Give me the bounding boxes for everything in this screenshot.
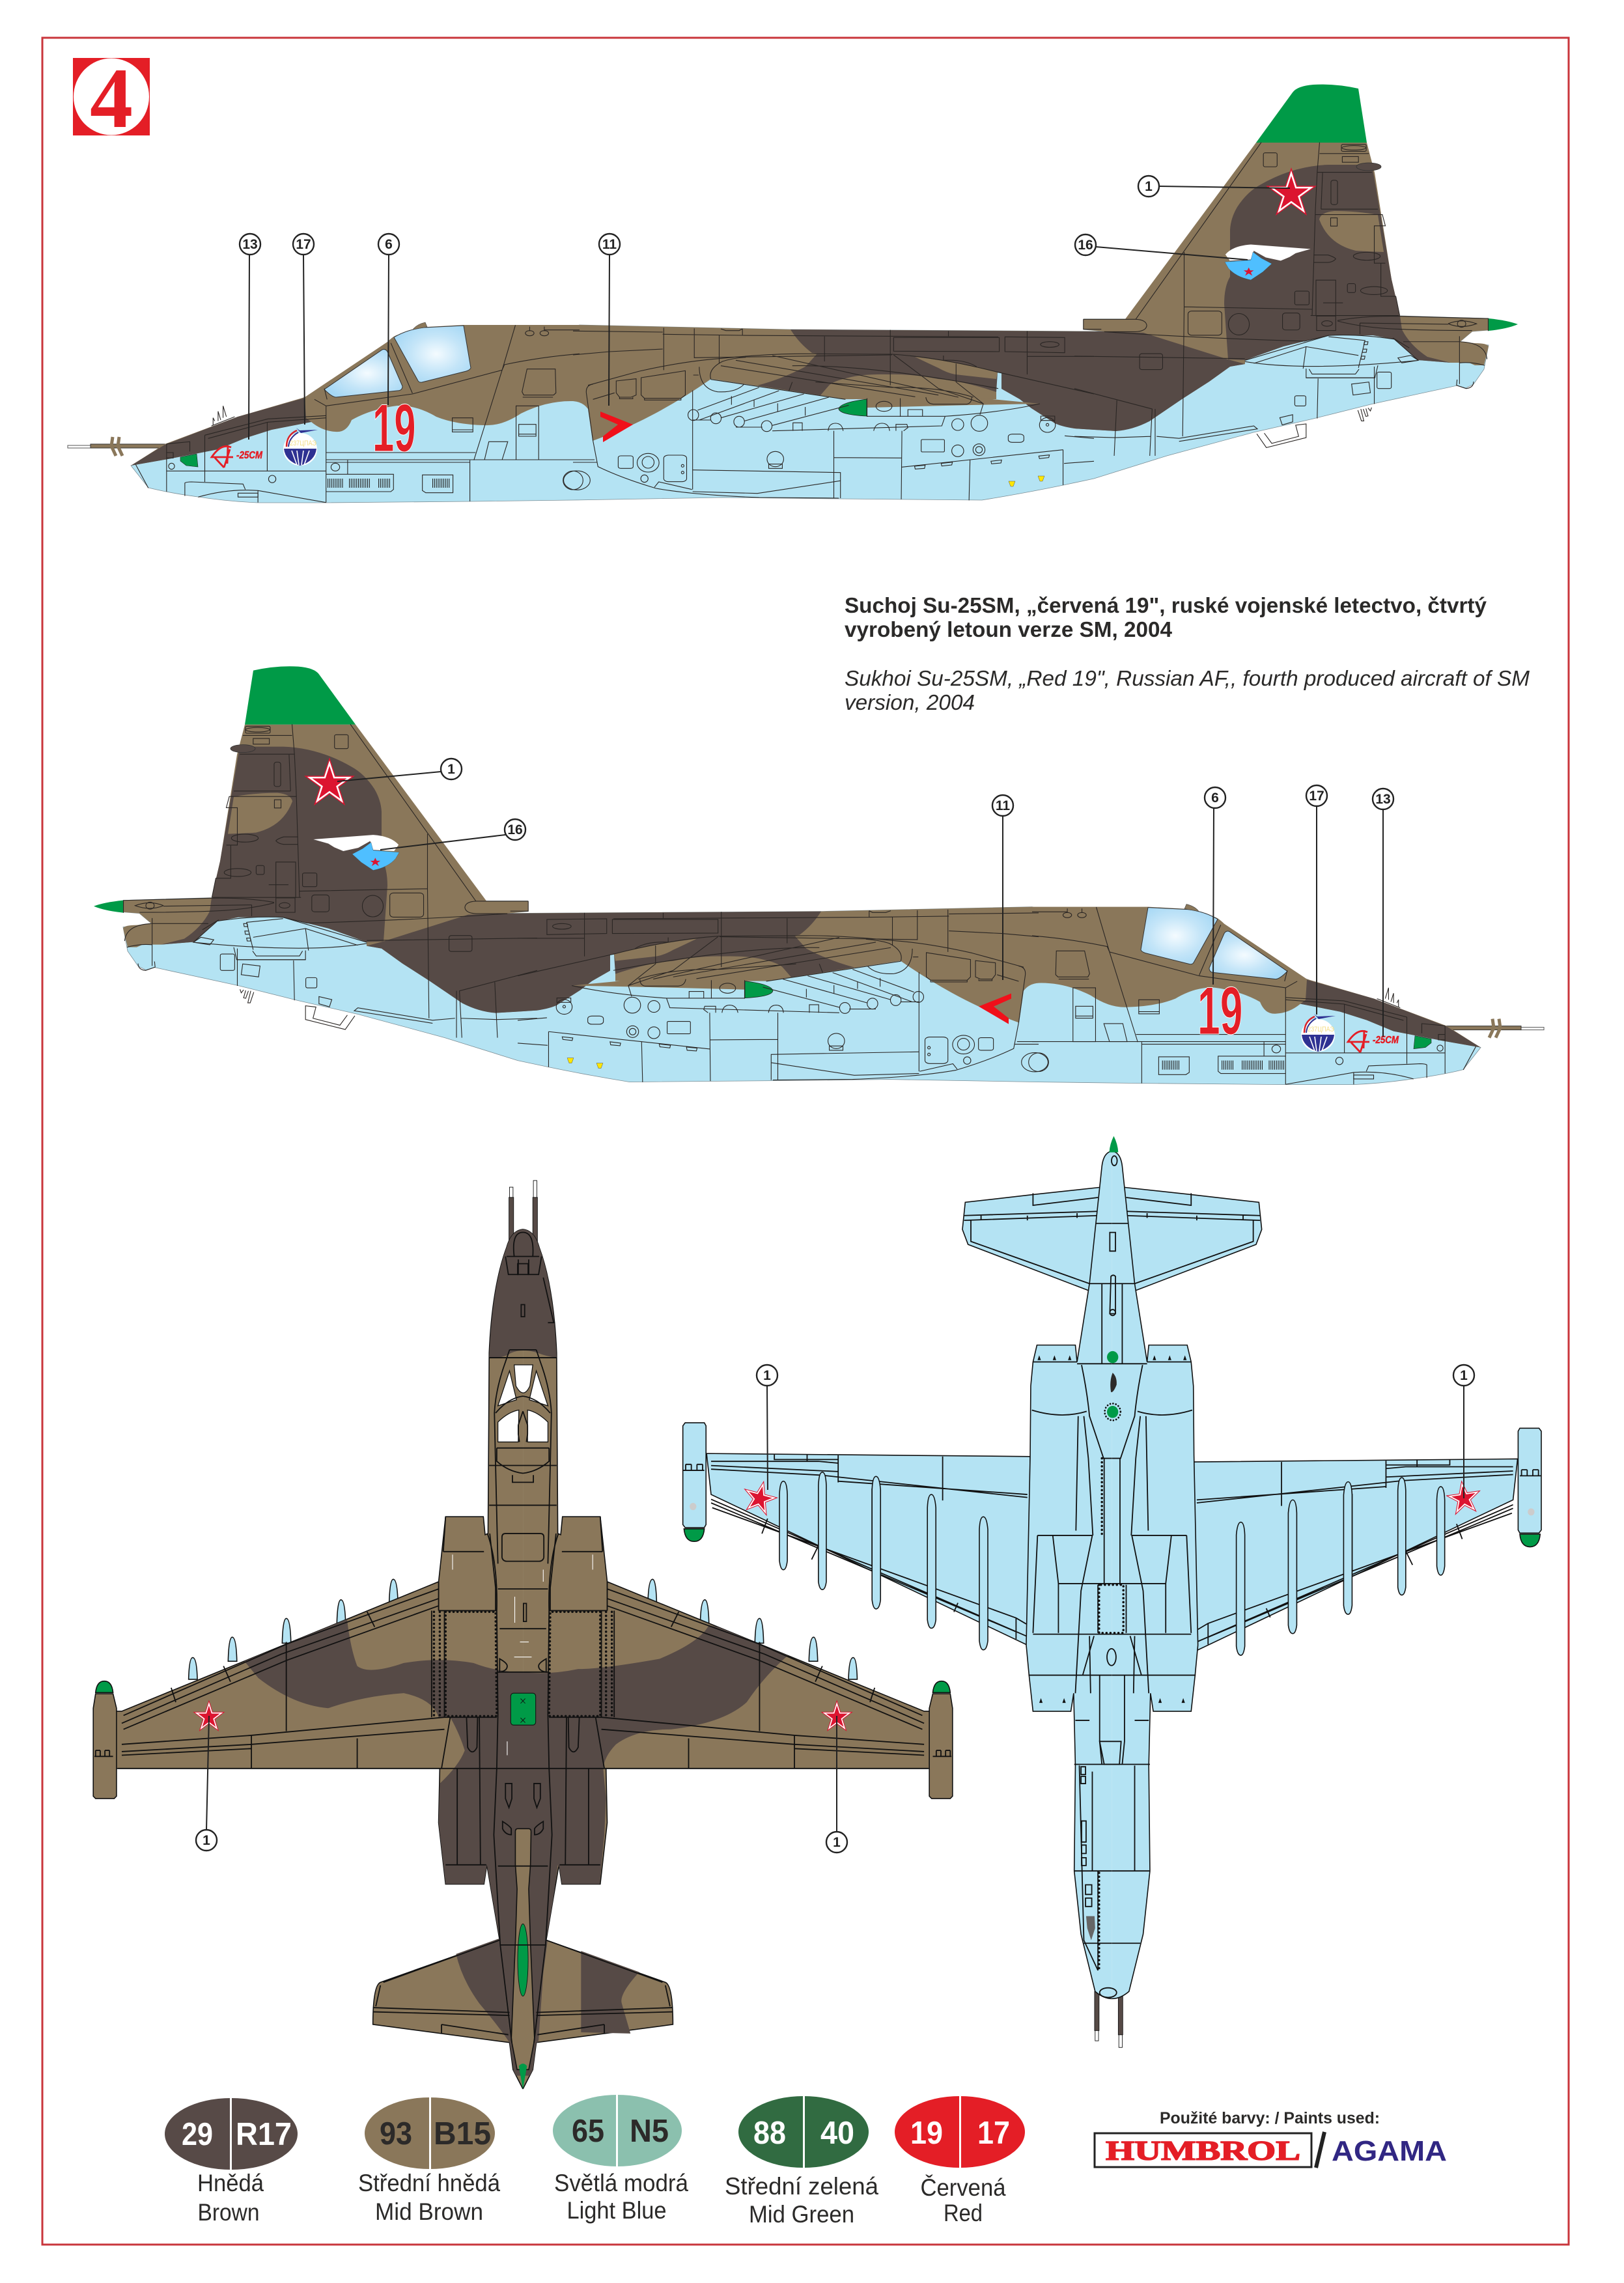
camouflage wing and body dark band	[241, 1617, 793, 2076]
camouflage right tailplane	[581, 1951, 639, 2034]
aircraft: right side profile	[94, 666, 1544, 1085]
callouts: lower profile: 6	[1211, 791, 1219, 805]
right wing star top	[821, 1700, 853, 1731]
callouts: upper profile: 11	[602, 237, 617, 252]
badge: profile number 4: 4	[90, 50, 133, 146]
callouts: upper profile	[240, 176, 1290, 440]
callouts: upper profile: 13	[242, 237, 258, 252]
wing half	[683, 1423, 1030, 1650]
green tail tip	[519, 2064, 527, 2089]
gun barrel	[68, 437, 167, 456]
nose side panels left only	[1080, 1765, 1135, 1970]
camouflage nose dark	[489, 1229, 557, 1358]
camouflage left tailplane	[456, 1939, 510, 2043]
paint swatch: brown: R17	[236, 2117, 292, 2152]
paint swatch: red: Red	[944, 2200, 983, 2226]
dark vent	[1110, 1373, 1117, 1392]
number 19 lower: 19	[1197, 973, 1242, 1049]
green access panel	[511, 1693, 536, 1725]
callouts: plan views: 1	[763, 1368, 771, 1383]
fuselage fill	[1026, 1151, 1112, 1998]
antenna behind canopy	[413, 322, 427, 329]
half airframe fill	[116, 1229, 523, 2089]
paint swatch: mid green: 88	[753, 2116, 786, 2151]
tailplane	[962, 1187, 1100, 1291]
dotted rows	[1099, 1459, 1123, 1970]
green fin tip	[1256, 85, 1367, 143]
wing pylons	[779, 1472, 988, 1650]
paint swatch: red: Červená	[921, 2174, 1006, 2201]
paint swatch: mid brown: 93	[380, 2116, 412, 2151]
callouts: plan views: 1	[833, 1835, 841, 1850]
camouflage: dark brown nose	[131, 398, 311, 466]
callouts: lower profile: 1	[447, 762, 455, 777]
paint swatch: red: 17	[977, 2116, 1010, 2151]
squadron logo on upper profile	[212, 445, 263, 468]
guns	[509, 1181, 537, 1257]
logo slash	[1316, 2132, 1324, 2168]
front canopy glass	[324, 349, 402, 397]
green fitting with ring	[1105, 1403, 1121, 1420]
paint swatch: light blue: 65	[572, 2114, 604, 2149]
camouflage: brown patch on fin	[1319, 211, 1384, 252]
callouts: plan views: 1	[203, 1833, 210, 1848]
wing roundels top	[193, 1700, 225, 1731]
paint swatch: mid green: Mid Green	[749, 2201, 854, 2228]
mirrored line work	[489, 1350, 928, 2043]
stabilizer green tip	[1489, 318, 1518, 331]
caption: English description	[845, 666, 1530, 714]
mirrored airframe fill	[523, 1229, 930, 2089]
fin fairing blob	[1356, 163, 1381, 171]
Humbrol logo: HUMBROL	[1106, 2136, 1300, 2166]
caption: Czech description	[845, 593, 1487, 641]
cannon opening detail	[1086, 1916, 1095, 1940]
camouflage: dark brown centre fuselage	[757, 329, 1245, 431]
red star on fin upper	[1266, 167, 1317, 216]
callouts: upper profile: 6	[385, 237, 393, 252]
green fin	[518, 1924, 528, 1996]
number 19 upper: 19	[372, 390, 416, 466]
Humbrol logo	[1095, 2133, 1311, 2167]
paint swatch: mid brown	[358, 2096, 500, 2225]
callouts: lower profile: 16	[507, 822, 523, 837]
camouflage: mid brown	[131, 143, 1489, 466]
round unit emblem on lower profile	[1301, 1014, 1336, 1052]
wing pylons stores	[189, 1579, 398, 1679]
half line work	[118, 1350, 557, 2043]
brown spine	[511, 1828, 535, 2069]
camouflage: brown lens on wing root	[915, 357, 998, 379]
paint swatch: brown: Brown	[198, 2199, 259, 2226]
badge: profile number 4	[73, 50, 150, 146]
winged parachute emblem lower	[313, 835, 399, 870]
paint swatch: mid brown: Střední hnědá	[358, 2170, 500, 2196]
caption: Czech description: vyrobený letoun verze SM, 2004	[845, 617, 1173, 641]
red chevron marking	[600, 412, 633, 442]
caption: English description: version, 2004	[845, 690, 975, 714]
fuselage line work	[1028, 1224, 1112, 1943]
fuselage base in light blue	[131, 316, 1489, 503]
paint swatch: light blue: Světlá modrá	[554, 2170, 688, 2196]
paint swatch: brown	[165, 2097, 298, 2226]
aircraft: left side profile	[68, 85, 1518, 503]
wing line work	[711, 1454, 1028, 1639]
paint swatch: mid green	[725, 2095, 878, 2228]
caption: Czech description: Suchoj Su-25SM, „červená 19", ruské vojenské letectvo, čtvrtý	[845, 593, 1487, 617]
right tip pod	[929, 1681, 953, 1799]
squadron logo on lower profile	[1348, 1030, 1399, 1052]
cockpit window panes	[498, 1365, 548, 1442]
green tail tip under	[1109, 1136, 1118, 1153]
half fuselage	[962, 1151, 1112, 1998]
panel lines: centre section	[563, 328, 1094, 500]
winged parachute emblem upper	[1225, 245, 1311, 280]
paint swatch: red	[895, 2095, 1025, 2226]
wing tip pods	[93, 1681, 117, 1799]
paint swatch: mid green: Střední zelená	[725, 2173, 878, 2200]
green oil cap	[1107, 1351, 1118, 1363]
aircraft: top view	[93, 1181, 953, 2089]
small white stencils	[453, 1554, 593, 1755]
Agama logo: AGAMA	[1332, 2135, 1447, 2167]
paint swatch: mid green: 40	[820, 2116, 854, 2151]
right half fuselage	[1112, 1151, 1262, 1998]
star left wing under	[739, 1476, 781, 1518]
star right wing under	[1444, 1478, 1483, 1517]
callouts: lower profile	[337, 759, 1393, 1037]
panel lines: tail section	[1074, 143, 1489, 456]
gun muzzle area detail	[505, 1233, 555, 1621]
triangle markers	[1037, 1355, 1071, 1703]
right wing half	[1194, 1428, 1541, 1655]
paint swatch: brown: 29	[182, 2117, 213, 2152]
squadron logo on upper profile: -25СМ	[236, 450, 263, 461]
paint swatch: brown: Hnědá	[197, 2170, 264, 2196]
callouts: plan views	[196, 1365, 1474, 1853]
wing pod	[867, 397, 1040, 408]
rear canopy glass	[394, 326, 471, 382]
guns	[1095, 1991, 1123, 2047]
pod green nose	[839, 399, 867, 416]
nose green panel	[180, 454, 198, 467]
callouts: lower profile: 11	[996, 798, 1010, 813]
red star on fin lower	[304, 757, 355, 805]
paint swatch: mid brown: B15	[434, 2116, 491, 2151]
callouts: lower profile: 17	[1309, 789, 1324, 804]
callouts: upper profile: 1	[1145, 179, 1153, 194]
mirrored perforated panels	[549, 1610, 614, 1717]
callouts: lower profile: 13	[1375, 792, 1391, 807]
camouflage: dark brown tail fin	[1224, 165, 1451, 363]
tailplane line work	[964, 1194, 1098, 1283]
paint swatch: mid brown: Mid Brown	[375, 2198, 483, 2225]
callouts: upper profile: 16	[1078, 238, 1093, 253]
callouts: upper profile: 17	[296, 237, 311, 252]
paint swatch: light blue: Light Blue	[567, 2197, 667, 2224]
vent grilles	[328, 479, 450, 488]
paint swatch: light blue: N5	[630, 2114, 669, 2149]
panel lines: nose section	[135, 325, 590, 503]
caption: English description: Sukhoi Su-25SM, „Red 19", Russian AF,, fourth produced aircraft of SM	[845, 666, 1530, 690]
callouts: plan views: 1	[1460, 1368, 1468, 1383]
perforated panels	[432, 1610, 497, 1717]
round unit emblem on upper profile: 237ЦПАЭ	[290, 440, 316, 447]
paint swatch: red: 19	[910, 2116, 943, 2151]
aircraft: bottom view	[683, 1136, 1541, 2047]
paint swatch: light blue	[553, 2094, 688, 2224]
round unit emblem on upper profile	[283, 428, 318, 466]
paints used heading: Použité barvy: / Paints used:	[1160, 2109, 1380, 2127]
squadron logo on lower profile: -25СМ	[1373, 1035, 1399, 1046]
central under details	[1100, 1156, 1121, 1997]
pod at wing tip	[683, 1423, 706, 1541]
yellow service markers	[1009, 476, 1044, 486]
right stores	[648, 1579, 857, 1679]
